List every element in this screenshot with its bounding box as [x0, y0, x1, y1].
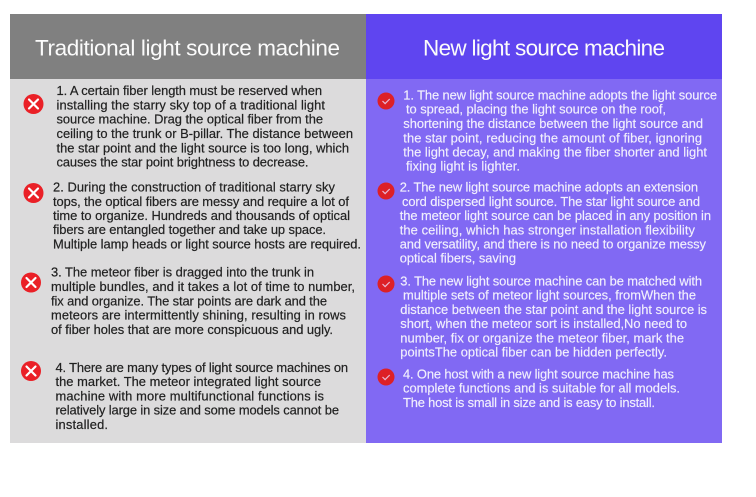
- icon: red cross: [24, 183, 44, 203]
- text block: item 2: tops, the optical fibers are messy and require a lot of: [53, 194, 349, 209]
- text block: item 2: 2. During the construction of traditional starry sky: [53, 180, 336, 195]
- text block: item 2: Multiple lamp heads or light source hosts are required.: [53, 236, 361, 251]
- text block: item 2: the ceiling, which has stronger installation flexibility: [400, 222, 696, 237]
- text block: item 3: meteors are intermittently shining, resulting in rows: [51, 308, 346, 323]
- text block: item 2: and versatility, and there is no need to organize messy: [400, 236, 707, 251]
- item 2: new machine benefit: [378, 180, 711, 266]
- text block: item 1: shortening the distance between the light source and: [403, 116, 703, 131]
- text block: item 2: fibers are entangled together and take up space.: [53, 222, 326, 237]
- heading: traditional light source machine: Traditional light source machine: [35, 36, 340, 60]
- text block: item 3: pointsThe optical fiber can be hidden perfectly.: [400, 345, 667, 360]
- text block: item 3: multiple sets of meteor light sources, fromWhen the: [403, 288, 696, 303]
- text block: item 4: [403, 366, 680, 410]
- icon: red cross: [24, 94, 44, 114]
- icon: red cross: [21, 361, 41, 381]
- item 1: new machine benefit: [378, 87, 717, 174]
- text block: item 1: causes the star point brightness to decrease.: [56, 155, 308, 170]
- text block: item 3: [400, 273, 707, 360]
- text block: item 4: installed.: [56, 417, 108, 432]
- icon: red check: [378, 182, 394, 200]
- text block: item 1: the star point, reducing the amount of fiber, ignoring: [403, 130, 702, 145]
- text block: item 1: 1. The new light source machine adopts the light source: [403, 87, 717, 102]
- text block: item 1: [56, 83, 353, 170]
- heading: new light source machine: [366, 14, 722, 79]
- text block: item 3: 3. The meteor fiber is dragged into the trunk in: [51, 265, 314, 280]
- text block: item 1: fixing light is lighter.: [406, 159, 520, 174]
- text block: item 3: [51, 265, 355, 337]
- text block: item 2: [400, 180, 711, 266]
- icon: red cross: [21, 272, 41, 292]
- text block: item 3: 3. The new light source machine can be matched with: [400, 273, 702, 288]
- text block: item 3: multiple bundles, and it takes a lot of time to number,: [51, 279, 355, 294]
- text block: item 4: The host is small in size and is easy to install.: [403, 395, 655, 410]
- panel: traditional light source machine: [10, 14, 366, 443]
- text block: item 1: the light decay, and making the fiber shorter and light: [403, 144, 707, 159]
- text block: item 4: 4. There are many types of light source machines on: [56, 360, 348, 375]
- text block: item 1: 1. A certain fiber length must be reserved when: [56, 83, 322, 98]
- text block: item 3: of fiber holes that are more conspicuous and ugly.: [51, 322, 333, 337]
- item 3: traditional drawback: [21, 265, 355, 337]
- text block: item 3: distance between the star point and the light source is: [400, 302, 707, 317]
- text block: item 4: complete functions and is suitable for all models.: [403, 381, 680, 396]
- text block: item 3: fix and organize. The star points are dark and the: [51, 293, 327, 308]
- icon: red check: [378, 276, 394, 292]
- text block: item 4: 4. One host with a new light source machine has: [403, 366, 674, 381]
- icon: red check: [378, 368, 394, 386]
- text block: item 4: relatively large in size and some models cannot be: [56, 403, 339, 418]
- text block: item 2: the meteor light source can be placed in any position in: [400, 208, 711, 223]
- text block: item 1: source machine. Drag the optical fiber from the: [56, 112, 323, 127]
- text block: item 1: to spread, placing the light source on the roof,: [406, 102, 666, 117]
- icon: red check: [378, 92, 394, 110]
- panel: new light source machine: [366, 14, 722, 443]
- heading: traditional light source machine: [10, 14, 366, 79]
- text block: item 1: ceiling to the trunk or B-pillar. The distance between: [56, 126, 353, 141]
- text block: item 2: cord dispersed light source. The star light source and: [402, 194, 700, 209]
- text block: item 2: time to organize. Hundreds and thousands of optical: [53, 208, 350, 223]
- text block: item 1: the star point and the light source is too long, which: [56, 140, 349, 155]
- heading: new light source machine: New light source machine: [423, 36, 665, 60]
- item 1: traditional drawback: [24, 83, 353, 170]
- item 3: new machine benefit: [378, 273, 707, 360]
- text block: item 4: [56, 360, 348, 432]
- text block: item 2: optical fibers, saving: [400, 251, 516, 266]
- item 4: new machine benefit: [378, 366, 680, 410]
- item 4: traditional drawback: [21, 360, 348, 432]
- text block: item 2: 2. The new light source machine adopts an extension: [400, 180, 698, 195]
- item 2: traditional drawback: [24, 180, 361, 251]
- text block: item 3: short, when the meteor sort is installed,No need to: [400, 316, 687, 331]
- text block: item 1: installing the starry sky top of a traditional light: [56, 97, 325, 112]
- text block: item 4: the market. The meteor integrated light source: [56, 374, 321, 389]
- text block: item 4: machine with more multifunctional functions is: [56, 388, 324, 403]
- text block: item 3: number, fix or organize the meteor fiber, mark the: [400, 330, 684, 345]
- text block: item 1: [403, 87, 717, 174]
- text block: item 2: [53, 180, 361, 251]
